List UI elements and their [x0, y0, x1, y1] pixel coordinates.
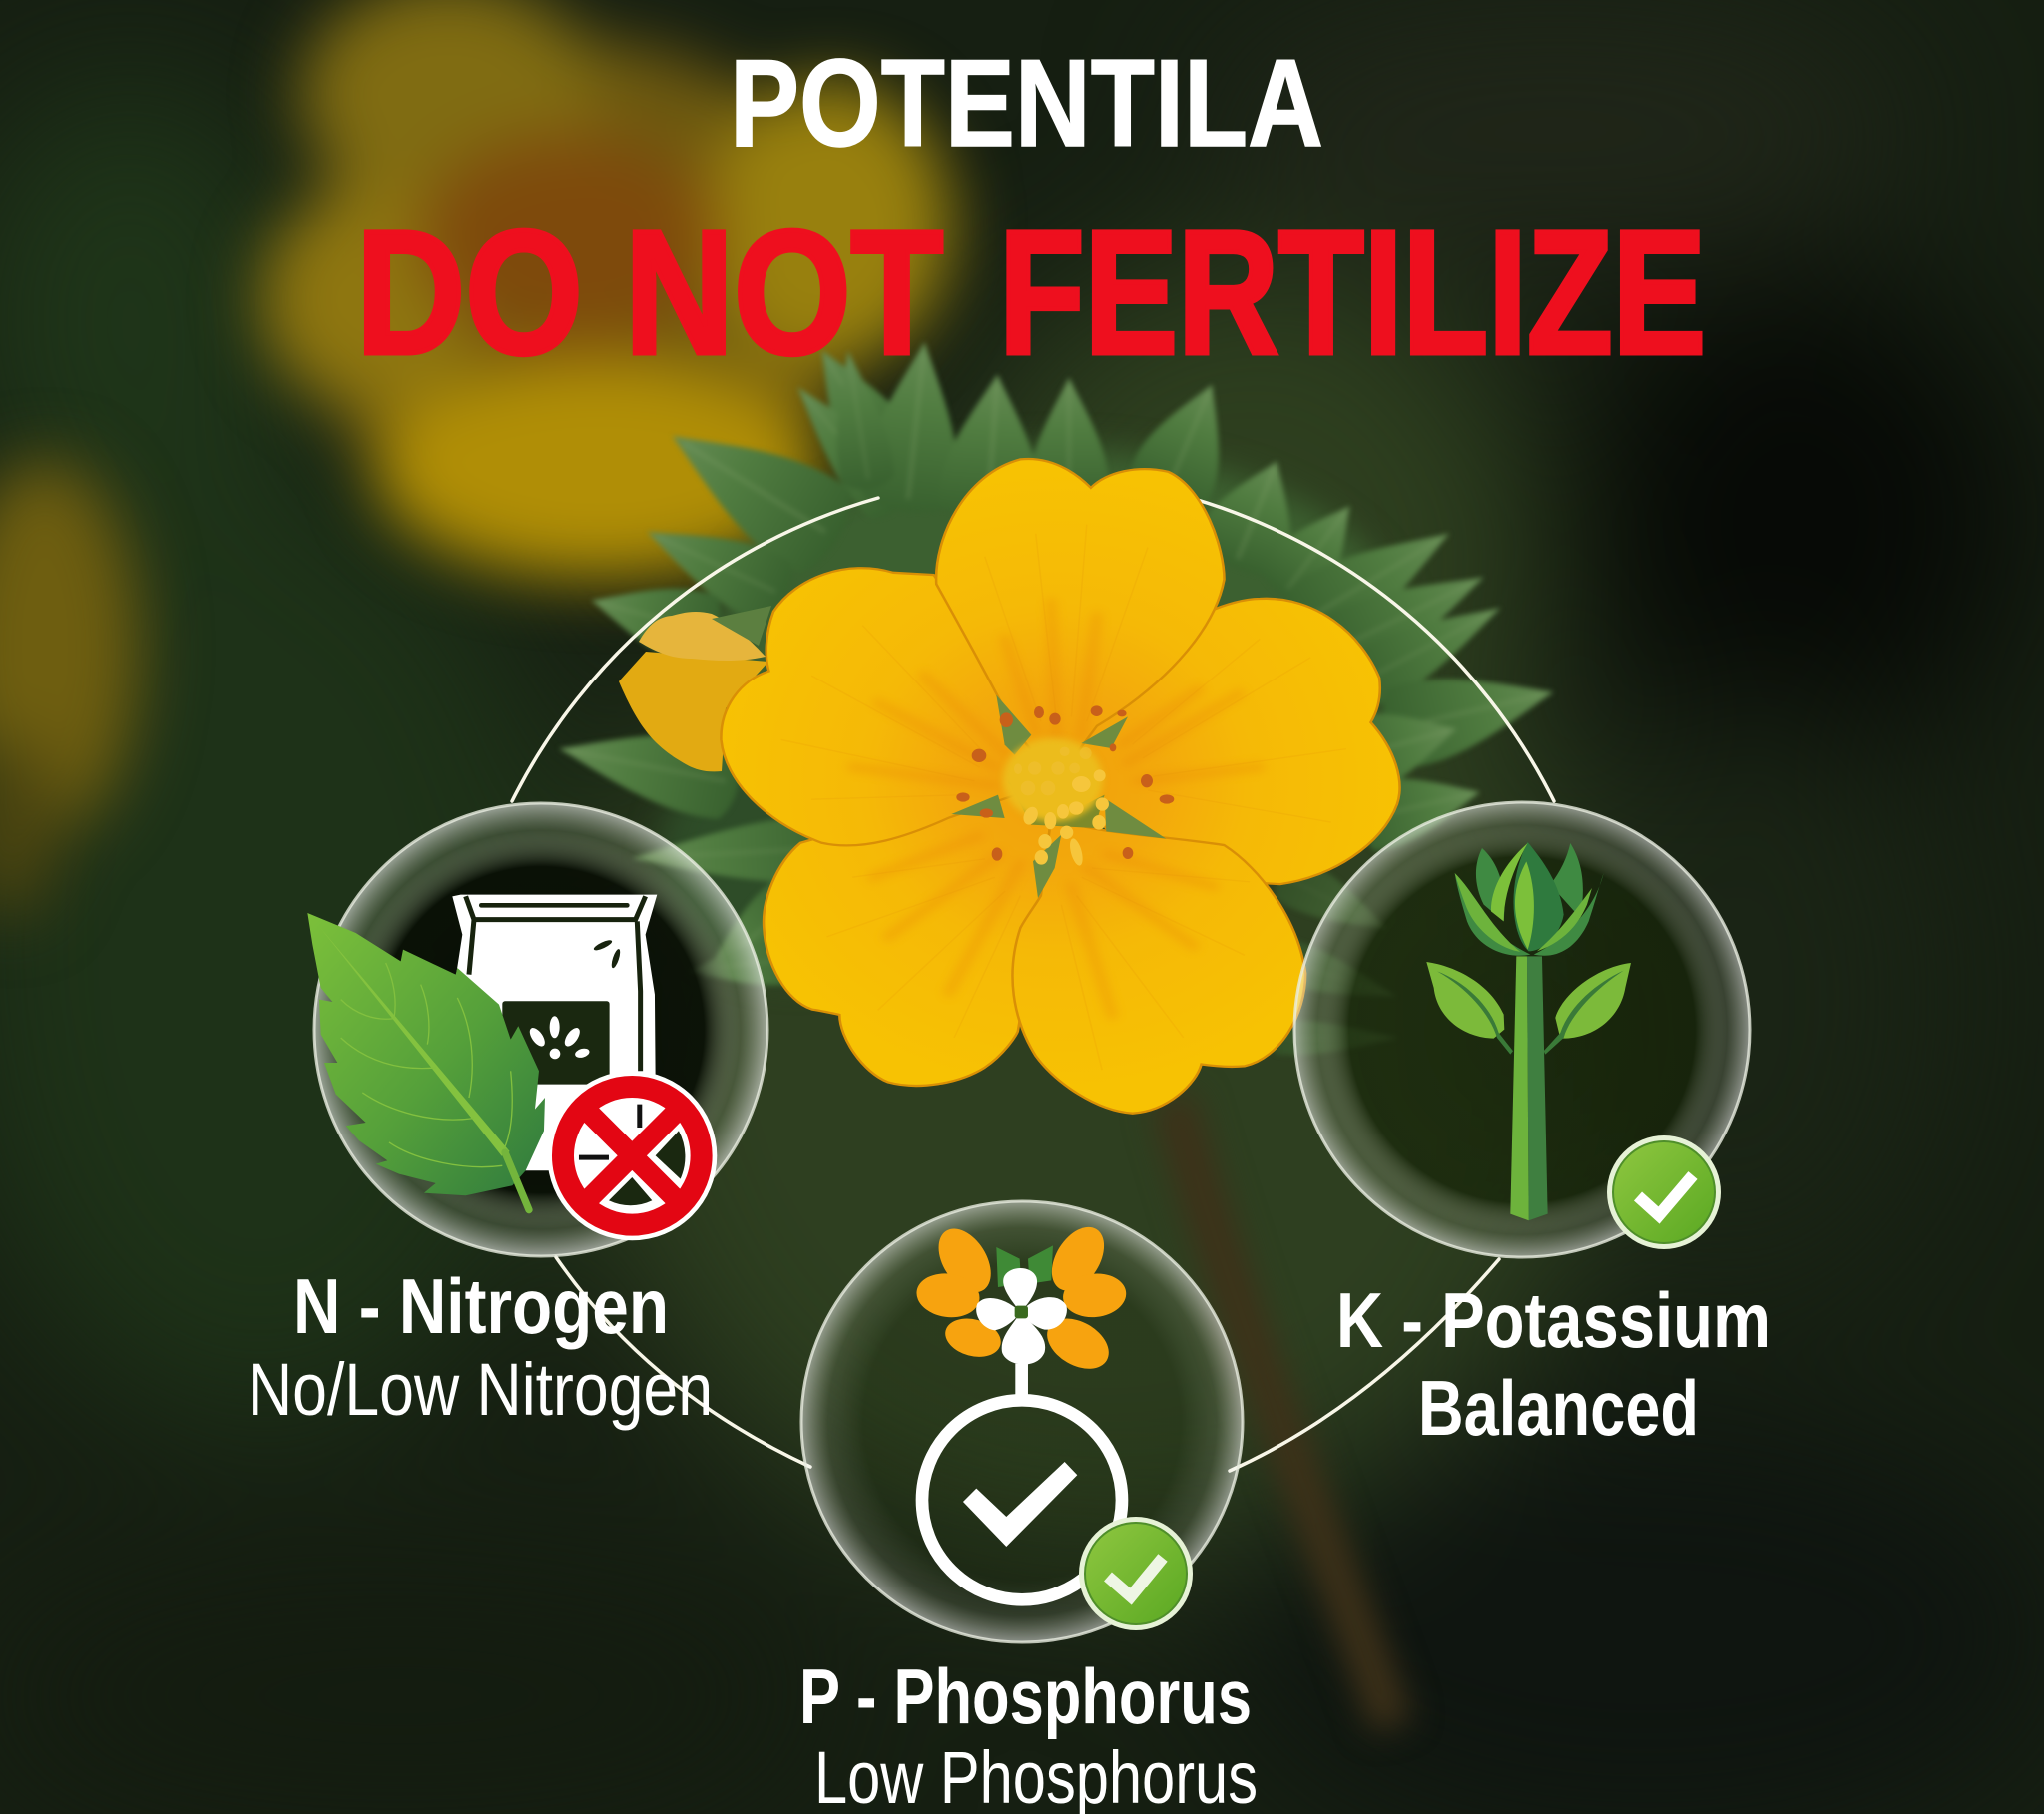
- label: potassium: K - Potassium: [1336, 1276, 1771, 1364]
- heading: do not fertilize: FERTILIZE: [999, 196, 1706, 391]
- heading: do not fertilize: [356, 196, 1706, 391]
- flower centre: [951, 695, 1174, 898]
- petal orange streaks: [852, 603, 1260, 1015]
- icon: fertilizer bag: [452, 895, 657, 1170]
- bubble: phosphorus icon: [801, 1201, 1243, 1642]
- bubble: potassium icon: [1294, 802, 1750, 1257]
- foliage behind the flower: [551, 331, 1563, 1055]
- label: nitrogen: N - Nitrogen: [293, 1262, 669, 1350]
- bubble: nitrogen icon: [307, 803, 767, 1256]
- petal veins: [781, 525, 1346, 1070]
- title: Potentila: POTENTILA: [730, 35, 1323, 173]
- badge: check mark: [1607, 1135, 1721, 1249]
- label: nitrogen: [248, 1262, 713, 1431]
- badge: check mark: [1079, 1517, 1193, 1630]
- label: phosphorus: [799, 1652, 1258, 1814]
- icon: green leaf: [307, 913, 545, 1210]
- connecting circle arcs: [512, 498, 1554, 1471]
- flower bud: [619, 606, 771, 771]
- label: potassium: Balanced: [1418, 1364, 1699, 1452]
- icon: red prohibition sign: [547, 1071, 717, 1240]
- label: phosphorus: P - Phosphorus: [799, 1652, 1252, 1740]
- heading: do not fertilize: DO NOT: [356, 196, 943, 391]
- central yellow flower: [721, 459, 1399, 1114]
- label: nitrogen: No/Low Nitrogen: [248, 1348, 713, 1431]
- label: potassium: [1336, 1276, 1771, 1452]
